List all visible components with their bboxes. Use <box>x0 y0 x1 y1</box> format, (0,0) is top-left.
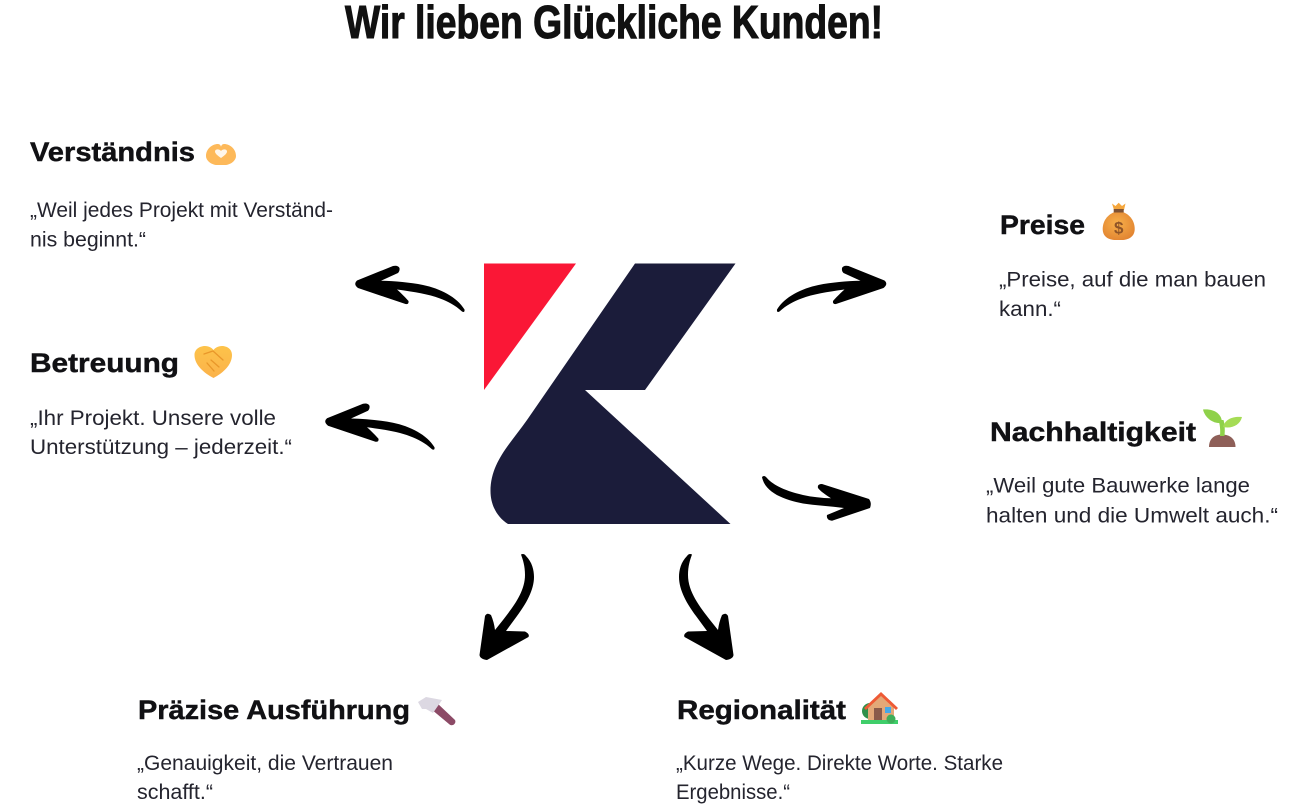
icon: heart hands <box>206 144 236 165</box>
icon: house <box>861 692 898 724</box>
heading: Betreuung: Betreuung <box>30 348 179 378</box>
arrow: to Regionalität <box>679 554 734 660</box>
icon: hammer <box>418 697 455 725</box>
heading: Preise: Preise <box>1000 210 1085 240</box>
logo: navy K shape <box>490 264 736 524</box>
quote: Regionalität: „Kurze Wege. Direkte Worte. Starke <box>676 751 1003 775</box>
panel: Nachhaltigkeit <box>986 409 1278 528</box>
panel: Regionalität <box>676 692 1003 804</box>
quote: Präzise Ausführung: schafft.“ <box>137 780 213 804</box>
icon: handshake <box>194 346 232 378</box>
quote: Verständnis: „Weil jedes Projekt mit Verständ- <box>30 198 333 222</box>
panel: Preise <box>999 203 1266 321</box>
icon: money bag <box>1103 203 1135 240</box>
quote: Nachhaltigkeit: „Weil gute Bauwerke lange <box>986 474 1250 498</box>
quote: Preise: „Preise, auf die man bauen <box>999 268 1266 292</box>
quote: Preise: kann.“ <box>999 297 1061 321</box>
heading: Präzise Ausführung: Präzise Ausführung <box>138 695 410 725</box>
central logo <box>484 264 736 524</box>
quote: Betreuung: „Ihr Projekt. Unsere volle <box>30 406 276 430</box>
quote: Präzise Ausführung <box>137 751 393 804</box>
quote: Regionalität: Ergebnisse.“ <box>676 780 790 804</box>
quote: Verständnis <box>30 198 333 252</box>
quote: Verständnis: nis beginnt.“ <box>30 228 146 252</box>
heading: Regionalität: Regionalität <box>677 695 846 725</box>
quote: Präzise Ausführung: „Genauigkeit, die Vertrauen <box>137 751 393 775</box>
panel: Präzise Ausführung <box>137 695 455 804</box>
quote: Preise <box>999 268 1266 321</box>
icon: money bag: $ <box>1114 218 1124 238</box>
panel: Betreuung <box>30 346 292 459</box>
quote: Nachhaltigkeit: halten und die Umwelt auch.“ <box>986 504 1278 528</box>
panel: Verständnis <box>30 137 333 252</box>
quote: Betreuung <box>30 406 292 459</box>
icon: seedling <box>1203 409 1242 447</box>
heading: Nachhaltigkeit: Nachhaltigkeit <box>990 417 1196 447</box>
arrow: to Nachhaltigkeit <box>762 476 871 521</box>
arrow: to Betreuung <box>325 403 435 450</box>
quote: Regionalität <box>676 751 1003 804</box>
quote: Nachhaltigkeit <box>986 474 1278 528</box>
arrow: to Verständnis <box>355 266 465 312</box>
heading: Verständnis: Verständnis <box>30 137 195 167</box>
quote: Betreuung: Unterstützung – jederzeit.“ <box>30 435 292 459</box>
arrow: to Preise <box>777 266 886 312</box>
logo: red triangle <box>484 264 576 390</box>
arrow: to Präzise Ausführung <box>480 554 534 660</box>
